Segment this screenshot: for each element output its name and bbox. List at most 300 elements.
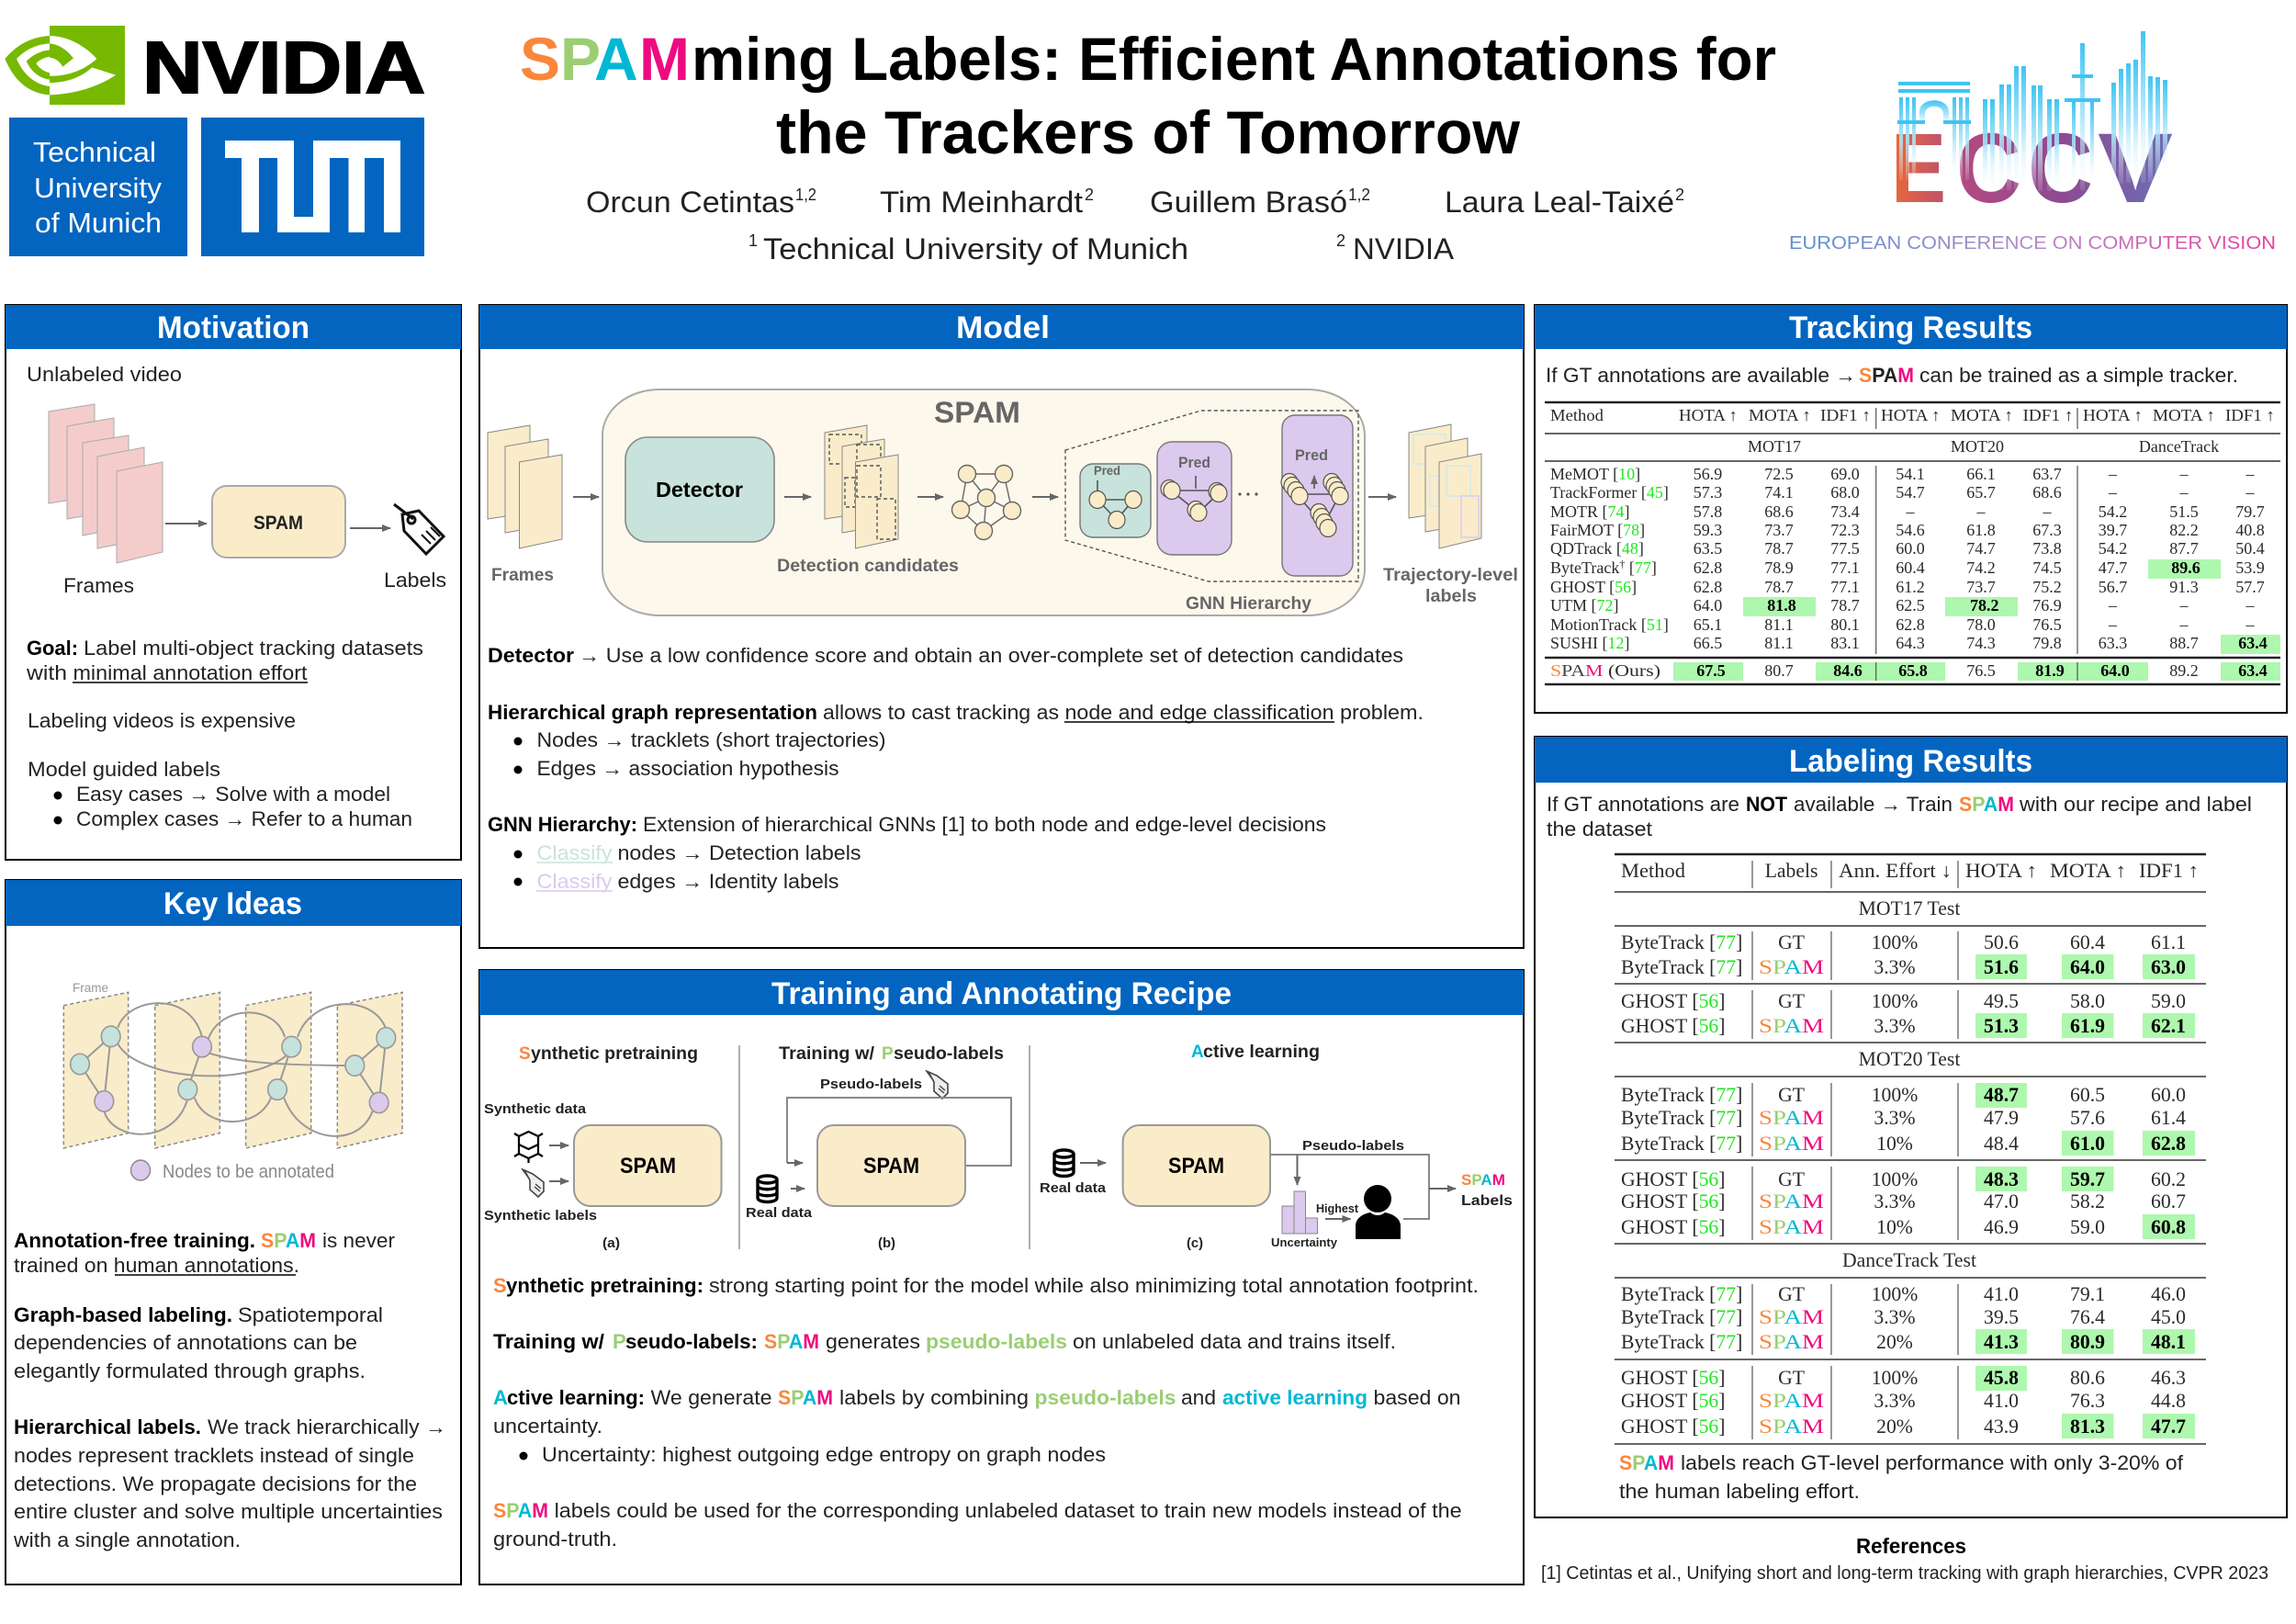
table rows: – bbox=[2178, 615, 2189, 634]
table rows: 61.8 bbox=[1966, 521, 1996, 539]
section: MOT20 Test: 57.6 bbox=[2070, 1107, 2105, 1129]
table rows: – bbox=[2043, 502, 2052, 521]
table header: MOTA ↑ bbox=[1951, 406, 2013, 424]
logo: NVIDIA bbox=[5, 26, 425, 108]
text: graph-based labeling: Graph-based labeling. bbox=[14, 1303, 232, 1326]
table rows: 65.7 bbox=[1966, 483, 1996, 502]
text: hierarchical graph representation: Nodes → tracklets (short trajectories) bbox=[536, 728, 885, 751]
text: conclusion bbox=[1619, 1451, 2184, 1503]
text: GT not available: the dataset bbox=[1547, 818, 1652, 840]
section: MOT17 Test: 3.3% bbox=[1874, 1015, 1916, 1037]
table rows: MeMOT [10] bbox=[1550, 465, 1640, 483]
diagram: training with pseudo-labels: P bbox=[882, 1044, 894, 1064]
section: DanceTrack Test: 80.9 bbox=[2070, 1331, 2105, 1353]
table rows: 65.1 bbox=[1694, 615, 1722, 634]
table rows: 66.1 bbox=[1966, 465, 1996, 483]
table rows: 81.8 bbox=[1767, 596, 1796, 615]
text: goal: Goal: bbox=[27, 637, 78, 660]
box: Detector: Detector bbox=[656, 478, 743, 502]
logo: Technical University of Munich: Technical bbox=[33, 136, 156, 168]
table header: MOTA ↑ bbox=[2153, 406, 2215, 424]
table rows: 63.4 bbox=[2238, 661, 2268, 680]
section: MOT20 Test: 48.3 bbox=[1984, 1168, 2019, 1190]
text: GT available: can be trained as a simple tracker. bbox=[1919, 364, 2238, 387]
heading: Key Ideas: Key Ideas bbox=[163, 886, 302, 921]
diagram: active learning: (c) bbox=[1187, 1235, 1203, 1251]
table rows: 77] bbox=[1635, 558, 1657, 577]
text: goal bbox=[26, 637, 423, 684]
table header: MOTA ↑ bbox=[2050, 860, 2126, 882]
section: MOT17 Test: 64.0 bbox=[2070, 956, 2105, 978]
section: DanceTrack Test: GHOST [56] bbox=[1621, 1367, 1725, 1389]
authors: 2 bbox=[1675, 186, 1684, 204]
section: DanceTrack Test: SPAM bbox=[1759, 1415, 1824, 1438]
section: MOT17 Test: 100% bbox=[1872, 990, 1918, 1012]
section: DanceTrack Test: 80.6 bbox=[2070, 1367, 2105, 1389]
text: GT not available: with our recipe and label bbox=[2019, 793, 2252, 816]
table rows: 74.3 bbox=[1966, 634, 1996, 652]
table header bbox=[1550, 406, 2275, 456]
text: goal: minimal annotation effort bbox=[73, 661, 307, 684]
table rows: 68.0 bbox=[1830, 483, 1860, 502]
table: labeling results bbox=[1615, 854, 2206, 1444]
table header: MOTA ↑ bbox=[1749, 406, 1811, 424]
table rows: – bbox=[2245, 615, 2256, 634]
table rows: 87.7 bbox=[2169, 539, 2199, 558]
table rows: 54.6 bbox=[1896, 521, 1925, 539]
title: M bbox=[639, 25, 690, 93]
text: SPAM labels usage: SPAM bbox=[493, 1499, 548, 1522]
text: graph-based labeling: elegantly formulated through graphs. bbox=[14, 1359, 366, 1382]
arrow bbox=[573, 496, 599, 498]
logo: ECCV: EUROPEAN CONFERENCE ON COMPUTER VISION bbox=[1789, 233, 2276, 254]
table rows: 53.9 bbox=[2235, 558, 2265, 577]
icon: label tag bbox=[394, 504, 444, 554]
diagram: active learning: SPAM bbox=[1168, 1154, 1224, 1179]
text: GNN hierarchy: GNN Hierarchy: bbox=[488, 813, 637, 836]
section: MOT20 Test: SPAM bbox=[1759, 1190, 1824, 1212]
text: active learning bbox=[493, 1386, 1460, 1466]
icon: graph bbox=[951, 465, 1021, 540]
diagram: active learning: A bbox=[1191, 1043, 1204, 1062]
section: DanceTrack Test: 76.4 bbox=[2070, 1306, 2105, 1328]
section: DanceTrack Test: 48.1 bbox=[2151, 1331, 2186, 1353]
text: training with pseudo-labels: pseudo-labels bbox=[926, 1330, 1067, 1353]
section: MOT20 Test: 47.9 bbox=[1984, 1107, 2019, 1129]
section: MOT20 Test: 61.4 bbox=[2151, 1107, 2186, 1129]
text: active learning: SPAM bbox=[778, 1386, 833, 1409]
heading: Labeling Results: Labeling Results bbox=[1789, 744, 2032, 779]
table header bbox=[1621, 860, 2199, 882]
table rows: † bbox=[1619, 558, 1625, 570]
affiliations: 2 bbox=[1336, 231, 1345, 250]
section: MOT17 Test: 49.5 bbox=[1984, 990, 2019, 1012]
text: conclusion: the human labeling effort. bbox=[1619, 1480, 1860, 1503]
text: graph-based labeling: dependencies of annotations can be bbox=[14, 1331, 357, 1354]
table rows: 91.3 bbox=[2169, 578, 2199, 596]
diagram: active learning: Pseudo-labels bbox=[1302, 1138, 1404, 1154]
table rows: 78.7 bbox=[1830, 596, 1860, 615]
section: DanceTrack Test: 3.3% bbox=[1874, 1390, 1916, 1412]
section: MOT20 Test: 100% bbox=[1872, 1084, 1918, 1106]
text: model guided labels bbox=[28, 758, 412, 830]
section: MOT20 Test: SPAM bbox=[1759, 1133, 1824, 1155]
table rows: UTM [72] bbox=[1550, 596, 1618, 615]
highlights bbox=[1975, 954, 2195, 1438]
title: A bbox=[594, 25, 638, 93]
section: MOT20 Test: GT bbox=[1778, 1084, 1805, 1106]
table rows: 40.8 bbox=[2235, 521, 2265, 539]
text: hierarchical graph representation: Hierarchical graph representation bbox=[488, 701, 817, 724]
text: synthetic pretraining: strong starting point for the model while also minimizing total annotation footprint. bbox=[709, 1274, 1479, 1297]
section: DanceTrack Test: 81.3 bbox=[2070, 1415, 2105, 1438]
section: MOT20 Test: 62.8 bbox=[2151, 1133, 2186, 1155]
section: DanceTrack Test bbox=[1621, 1249, 2186, 1438]
text: model guided labels: Complex cases → Refer to a human bbox=[76, 807, 412, 830]
section: MOT20 Test: 59.0 bbox=[2070, 1216, 2105, 1238]
table rows: 78.7 bbox=[1764, 578, 1794, 596]
section: MOT17 Test: GHOST [56] bbox=[1621, 1015, 1725, 1037]
section: MOT20 Test: 61.0 bbox=[2070, 1133, 2105, 1155]
section: MOT17 Test bbox=[1621, 897, 2186, 1037]
section: MOT20 Test: 100% bbox=[1872, 1168, 1918, 1190]
text: hierarchical graph representation: Edges → association hypothesis bbox=[536, 757, 839, 780]
table rows: 59.3 bbox=[1694, 521, 1722, 539]
diagram: training with pseudo-labels bbox=[746, 1044, 1011, 1251]
table rows: 84.6 bbox=[1833, 661, 1863, 680]
section: DanceTrack Test: 47.7 bbox=[2151, 1415, 2186, 1438]
section: DanceTrack Test: 44.8 bbox=[2151, 1390, 2186, 1412]
table rows: 79.7 bbox=[2235, 502, 2265, 521]
table rows: 76.9 bbox=[2032, 596, 2062, 615]
label: Trajectory-level labels bbox=[1383, 566, 1518, 606]
section: MOT17 Test: 58.0 bbox=[2070, 990, 2105, 1012]
section: DanceTrack Test: 41.0 bbox=[1984, 1390, 2019, 1412]
section: MOT20 Test: GHOST [56] bbox=[1621, 1168, 1725, 1190]
section: MOT20 Test: 60.5 bbox=[2070, 1084, 2105, 1106]
table rows: [ bbox=[1625, 558, 1635, 577]
section: DanceTrack Test: 100% bbox=[1872, 1367, 1918, 1389]
title bbox=[520, 25, 1776, 166]
heading: Model: Model bbox=[956, 310, 1050, 345]
table rows: – bbox=[1905, 502, 1916, 521]
text: active learning: A bbox=[493, 1386, 508, 1409]
label: Frames: Frames bbox=[63, 574, 134, 597]
table rows: – bbox=[2245, 596, 2256, 615]
table: tracking results bbox=[1545, 402, 2280, 684]
table rows: 54.1 bbox=[1896, 465, 1925, 483]
section: MOT20 Test: 60.8 bbox=[2151, 1216, 2186, 1238]
table rows: 74.7 bbox=[1966, 539, 1996, 558]
table rows: 50.4 bbox=[2235, 539, 2265, 558]
table rows: ByteTrack bbox=[1550, 558, 1619, 577]
text: detector: Detector bbox=[488, 644, 574, 667]
table rows: 80.1 bbox=[1830, 615, 1860, 634]
icon: video frames bbox=[49, 404, 163, 563]
diagram: active learning: ctive learning bbox=[1203, 1043, 1320, 1062]
section: MOT20 Test: 59.7 bbox=[2070, 1168, 2105, 1190]
section: DanceTrack Test: 20% bbox=[1876, 1331, 1913, 1353]
text: synthetic pretraining: ynthetic pretraining: bbox=[506, 1274, 703, 1297]
diagram: active learning: Uncertainty bbox=[1271, 1235, 1338, 1249]
table rows: TrackFormer [45] bbox=[1550, 483, 1669, 502]
section: DanceTrack Test: GT bbox=[1778, 1283, 1805, 1305]
label: Unlabeled video: Unlabeled video bbox=[27, 363, 182, 386]
table rows: 73.7 bbox=[1764, 521, 1794, 539]
table rows: MOTR [74] bbox=[1550, 502, 1629, 521]
logo: NVIDIA: NVIDIA bbox=[142, 27, 425, 108]
section: DanceTrack Test: SPAM bbox=[1759, 1306, 1824, 1328]
heading: Training and Annotating Recipe: Training and Annotating Recipe bbox=[771, 976, 1232, 1011]
section: MOT20 Test: SPAM bbox=[1759, 1107, 1824, 1129]
diagram: training with pseudo-labels: Training w/ bbox=[779, 1044, 875, 1064]
table rows: 63.5 bbox=[1694, 539, 1722, 558]
text: GNN hierarchy: edges → Identity labels bbox=[617, 870, 839, 893]
section: MOT20 Test: 47.0 bbox=[1984, 1190, 2019, 1212]
legend: nodes to be annotated: Nodes to be annotated bbox=[163, 1162, 334, 1182]
logo: ECCV: C bbox=[1956, 112, 2021, 223]
diagram: active learning bbox=[1040, 1043, 1513, 1251]
text: active learning: and bbox=[1181, 1386, 1216, 1409]
affiliations: Technical University of Munich bbox=[763, 232, 1188, 265]
section: MOT20 Test: SPAM bbox=[1759, 1216, 1824, 1238]
section: MOT17 Test: GT bbox=[1778, 990, 1805, 1012]
section: DanceTrack Test: 41.3 bbox=[1984, 1331, 2019, 1353]
text: GT not available: NOT bbox=[1746, 793, 1788, 816]
references bbox=[1541, 1534, 2268, 1584]
table rows: 81.1 bbox=[1764, 634, 1794, 652]
section: MOT17 Test: MOT17 Test bbox=[1859, 897, 1960, 919]
diagram: active learning: PAM bbox=[1471, 1171, 1505, 1189]
text: annotation-free training: trained on human annotations. bbox=[14, 1254, 299, 1277]
authors: Guillem Brasó bbox=[1150, 186, 1347, 219]
table rows: 81.9 bbox=[2035, 661, 2065, 680]
table rows: 77.1 bbox=[1830, 578, 1860, 596]
table rows: 89.2 bbox=[2169, 661, 2199, 680]
table header: IDF1 ↑ bbox=[2022, 406, 2074, 424]
table rows: 78.7 bbox=[1764, 539, 1794, 558]
text: active learning: ctive learning: bbox=[507, 1386, 645, 1409]
section: MOT17 Test: 62.1 bbox=[2151, 1015, 2186, 1037]
section: MOT20 Test bbox=[1621, 1048, 2186, 1238]
text: graph-based labeling: Spatiotemporal bbox=[238, 1303, 383, 1326]
logo: Technical University of Munich: of Munich bbox=[35, 207, 162, 239]
table rows: 78.9 bbox=[1764, 558, 1794, 577]
section: MOT17 Test: 59.0 bbox=[2151, 990, 2186, 1012]
section: MOT20 Test: 60.0 bbox=[2151, 1084, 2186, 1106]
section: DanceTrack Test: 39.5 bbox=[1984, 1306, 2019, 1328]
table rows: 54.2 bbox=[2099, 539, 2127, 558]
section: DanceTrack Test: 76.3 bbox=[2070, 1390, 2105, 1412]
label: Trajectory-level labels: labels bbox=[1425, 587, 1477, 606]
table rows: 75.2 bbox=[2032, 578, 2062, 596]
text: GT available bbox=[1546, 364, 2238, 387]
section: MOT20 Test: ByteTrack [77] bbox=[1621, 1133, 1742, 1155]
text: hierarchical labels: nodes represent tracklets instead of single bbox=[14, 1444, 414, 1467]
text: GT not available: available → Train bbox=[1794, 793, 1953, 816]
section: MOT17 Test: 61.9 bbox=[2070, 1015, 2105, 1037]
logo: ECCV: C bbox=[2028, 112, 2093, 223]
table rows: 82.2 bbox=[2169, 521, 2199, 539]
table rows: 39.7 bbox=[2099, 521, 2127, 539]
text: hierarchical labels: We track hierarchically → bbox=[208, 1415, 446, 1438]
table rows: 77.1 bbox=[1830, 558, 1860, 577]
table rows: 68.6 bbox=[1764, 502, 1794, 521]
text: GNN hierarchy: Classify bbox=[536, 870, 612, 893]
section: DanceTrack Test: 100% bbox=[1872, 1283, 1918, 1305]
title: P bbox=[560, 25, 601, 93]
table rows: SUSHI [12] bbox=[1550, 634, 1630, 652]
table rows: – bbox=[2245, 483, 2256, 502]
table rows: 62.5 bbox=[1896, 596, 1925, 615]
table rows: – bbox=[2178, 483, 2189, 502]
section: MOT17 Test: 61.1 bbox=[2151, 931, 2186, 953]
section: MOT17 Test: 51.6 bbox=[1984, 956, 2019, 978]
text: goal: with bbox=[26, 661, 67, 684]
diagram: training with pseudo-labels: Pseudo-labels bbox=[820, 1077, 922, 1092]
section: MOT17 Test: SPAM bbox=[1759, 956, 1824, 978]
section: DanceTrack Test: 3.3% bbox=[1874, 1306, 1916, 1328]
table header: IDF1 ↑ bbox=[1820, 406, 1871, 424]
table rows: 54.2 bbox=[2099, 502, 2127, 521]
diagram: active learning: Real data bbox=[1040, 1180, 1107, 1196]
table rows: FairMOT [78] bbox=[1550, 521, 1645, 539]
diagram: synthetic pretraining: Synthetic labels bbox=[484, 1208, 597, 1224]
table rows: 63.4 bbox=[2238, 634, 2268, 652]
table rows: SPA M (Ours) bbox=[1550, 661, 1660, 681]
table rows: GHOST [56] bbox=[1550, 578, 1637, 596]
label: Frame: Frame bbox=[73, 980, 108, 995]
section: DanceTrack Test: GHOST [56] bbox=[1621, 1415, 1725, 1438]
diagram: training with pseudo-labels: seudo-labels bbox=[894, 1044, 1004, 1064]
section: MOT17 Test: GT bbox=[1778, 931, 1805, 953]
table header: HOTA ↑ bbox=[2083, 406, 2143, 424]
section: MOT17 Test: 50.6 bbox=[1984, 931, 2019, 953]
panel: Tracking Results bbox=[1535, 305, 2287, 713]
text: conclusion: labels reach GT-level performance with only 3-20% of bbox=[1681, 1451, 2184, 1474]
table rows: – bbox=[2108, 465, 2118, 483]
arrow bbox=[917, 496, 943, 498]
section: DanceTrack Test: 45.8 bbox=[1984, 1367, 2019, 1389]
table header: HOTA ↑ bbox=[1965, 860, 2037, 882]
section: MOT20 Test: 3.3% bbox=[1874, 1190, 1916, 1212]
logo: ECCV: E bbox=[1891, 112, 1946, 223]
section: MOT20 Test: 46.9 bbox=[1984, 1216, 2019, 1238]
text: GT not available bbox=[1547, 793, 2252, 840]
table rows: 83.1 bbox=[1830, 634, 1860, 652]
box: SPAM: SPAM bbox=[253, 513, 303, 534]
table rows: 56.9 bbox=[1694, 465, 1722, 483]
table header: MOT20 bbox=[1951, 437, 2004, 456]
table header: DanceTrack bbox=[2139, 437, 2219, 456]
text: SPAM labels usage: ground-truth. bbox=[493, 1528, 617, 1551]
section: DanceTrack Test: 20% bbox=[1876, 1415, 1913, 1438]
table rows: 69.0 bbox=[1830, 465, 1860, 483]
table rows: 79.8 bbox=[2032, 634, 2062, 652]
table rows: 68.6 bbox=[2032, 483, 2062, 502]
section: MOT20 Test: GT bbox=[1778, 1168, 1805, 1190]
text: GNN hierarchy: Extension of hierarchical GNNs [1] to both node and edge-level decisions bbox=[643, 813, 1326, 836]
table rows: 88.7 bbox=[2169, 634, 2199, 652]
diagram: GNN hierarchy bbox=[1065, 411, 1358, 581]
text: hierarchical graph representation: allows to cast tracking as bbox=[823, 701, 1059, 724]
text: active learning: pseudo-labels bbox=[1034, 1386, 1176, 1409]
references: References bbox=[1856, 1534, 1966, 1558]
label: Labels: Labels bbox=[384, 569, 446, 592]
text: training with pseudo-labels: generates bbox=[826, 1330, 920, 1353]
text: training with pseudo-labels: Training w/ bbox=[493, 1330, 604, 1353]
affiliations: NVIDIA bbox=[1353, 232, 1455, 265]
section: MOT17 Test: 51.3 bbox=[1984, 1015, 2019, 1037]
diagram: synthetic pretraining: Synthetic data bbox=[484, 1101, 587, 1117]
affiliations bbox=[748, 231, 1455, 265]
table rows: 80.7 bbox=[1764, 661, 1794, 680]
heading: Tracking Results: Tracking Results bbox=[1789, 310, 2032, 345]
table header: MOT17 bbox=[1748, 437, 1801, 456]
section: MOT20 Test: 60.7 bbox=[2151, 1190, 2186, 1212]
table header: IDF1 ↑ bbox=[2225, 406, 2275, 424]
box: SPAM bbox=[212, 486, 345, 558]
diagram: synthetic pretraining: S bbox=[519, 1044, 531, 1064]
section: MOT20 Test: ByteTrack [77] bbox=[1621, 1084, 1742, 1106]
arrow bbox=[350, 527, 390, 529]
table rows: 67.3 bbox=[2032, 521, 2062, 539]
section: DanceTrack Test: SPAM bbox=[1759, 1390, 1824, 1412]
text: GT not available: SPAM bbox=[1959, 793, 2014, 816]
table rows: 65.8 bbox=[1898, 661, 1928, 680]
table rows: – bbox=[2245, 465, 2256, 483]
table rows: 78.0 bbox=[1966, 615, 1996, 634]
section: MOT20 Test: ByteTrack [77] bbox=[1621, 1107, 1742, 1129]
table rows: 57.3 bbox=[1694, 483, 1722, 502]
arrow bbox=[1032, 496, 1058, 498]
table rows: QDTrack [48] bbox=[1550, 539, 1644, 558]
logo: Technical University of Munich: University bbox=[34, 172, 162, 204]
text: active learning: uncertainty. bbox=[493, 1415, 602, 1438]
section: MOT20 Test: GHOST [56] bbox=[1621, 1190, 1725, 1212]
table rows: 72.3 bbox=[1830, 521, 1860, 539]
table header: HOTA ↑ bbox=[1679, 406, 1738, 424]
text: goal: Label multi-object tracking datasets bbox=[84, 637, 423, 660]
section: MOT17 Test: 63.0 bbox=[2151, 956, 2186, 978]
text: hierarchical graph representation bbox=[488, 701, 1424, 780]
heading: Motivation: Motivation bbox=[157, 310, 310, 345]
section: DanceTrack Test: ByteTrack [77] bbox=[1621, 1331, 1742, 1353]
affiliations: 1 bbox=[748, 231, 758, 250]
section: MOT20 Test: 48.7 bbox=[1984, 1084, 2019, 1106]
table rows: 47.7 bbox=[2099, 558, 2127, 577]
section: DanceTrack Test: SPAM bbox=[1759, 1331, 1824, 1353]
table rows: 61.2 bbox=[1896, 578, 1925, 596]
diagram: training with pseudo-labels: (b) bbox=[878, 1235, 895, 1251]
table rows: 56.7 bbox=[2099, 578, 2127, 596]
diagram: training with pseudo-labels: Real data bbox=[746, 1205, 813, 1221]
table rows: 51.5 bbox=[2169, 502, 2199, 521]
table header: Method bbox=[1550, 406, 1604, 424]
section: MOT20 Test: 48.4 bbox=[1984, 1133, 2019, 1155]
text: training with pseudo-labels: on unlabeled data and trains itself. bbox=[1073, 1330, 1396, 1353]
section: MOT20 Test: 60.2 bbox=[2151, 1168, 2186, 1190]
diagram: active learning: Highest bbox=[1316, 1201, 1359, 1215]
table rows: 81.1 bbox=[1764, 615, 1794, 634]
section: MOT17 Test: ByteTrack [77] bbox=[1621, 956, 1742, 978]
diagram: training with pseudo-labels: SPAM bbox=[863, 1154, 919, 1179]
box: Detector bbox=[625, 437, 774, 542]
table rows: – bbox=[2178, 465, 2189, 483]
diagram: synthetic pretraining: (a) bbox=[602, 1235, 620, 1251]
table header: Method bbox=[1621, 860, 1685, 882]
text: hierarchical graph representation: problem. bbox=[1340, 701, 1424, 724]
